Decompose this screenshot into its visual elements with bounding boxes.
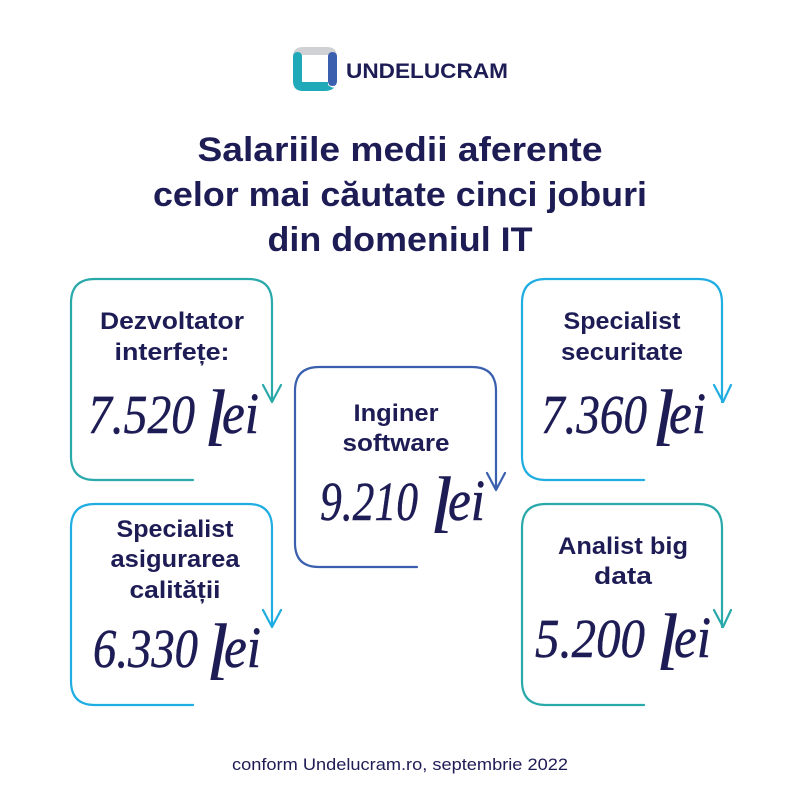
salary: ei: [222, 381, 259, 446]
salary: ei: [674, 605, 711, 670]
icon: logo square: [293, 47, 337, 91]
logo wordmark: UNDELUCRAM: [346, 60, 508, 83]
title: [153, 131, 647, 259]
panel: Specialist securitate: securitate: [561, 339, 683, 366]
salary: [93, 607, 261, 698]
job label: Specialist: [564, 308, 680, 335]
frame arrow: [522, 504, 731, 705]
salary: l: [206, 607, 229, 698]
panel: Inginer software: [295, 367, 505, 567]
frame arrow: [522, 279, 731, 480]
salary: 7.360: [541, 384, 647, 445]
panel: Analist big data: data: [594, 563, 653, 590]
title: celor mai căutate cinci joburi: [153, 176, 647, 214]
frame arrow: [295, 367, 505, 567]
frame arrow: [71, 504, 281, 705]
panel: Analist big data: [522, 504, 731, 705]
salary: ei: [669, 381, 706, 446]
source note: conform Undelucram.ro, septembrie 2022: [232, 756, 568, 774]
panel: Specialist asigurarea calității: [71, 504, 281, 705]
job label: Specialist: [116, 516, 234, 543]
salary: 7.520: [88, 384, 195, 445]
job label: Analist big: [558, 533, 688, 560]
title: Salariile medii aferente: [198, 131, 602, 169]
salary: [535, 597, 711, 688]
salary: 5.200: [535, 608, 645, 669]
salary: l: [204, 373, 227, 464]
salary: [88, 373, 259, 464]
salary: [320, 460, 485, 551]
salary: l: [656, 597, 679, 688]
job label: Dezvoltator: [100, 308, 244, 335]
title: din domeniul IT: [268, 221, 533, 259]
panel: Specialist securitate: [522, 279, 731, 480]
panel: Inginer software: software: [342, 430, 450, 457]
salary: ei: [448, 468, 485, 533]
salary: ei: [224, 615, 261, 680]
panel: Dezvoltator interfețe: interfețe:: [114, 339, 230, 366]
salary: l: [652, 373, 675, 464]
job label: Inginer: [354, 400, 438, 427]
salary: l: [430, 460, 453, 551]
salary: 9.210: [320, 471, 418, 532]
panel: Specialist asigurarea calității: asigurarea: [110, 546, 240, 573]
panel: Specialist asigurarea calității: calității: [130, 577, 220, 604]
salary: 6.330: [93, 618, 198, 679]
panel: Dezvoltator interfețe: [71, 279, 281, 480]
salary: [541, 373, 706, 464]
logo: [293, 47, 508, 91]
frame arrow: [71, 279, 281, 480]
